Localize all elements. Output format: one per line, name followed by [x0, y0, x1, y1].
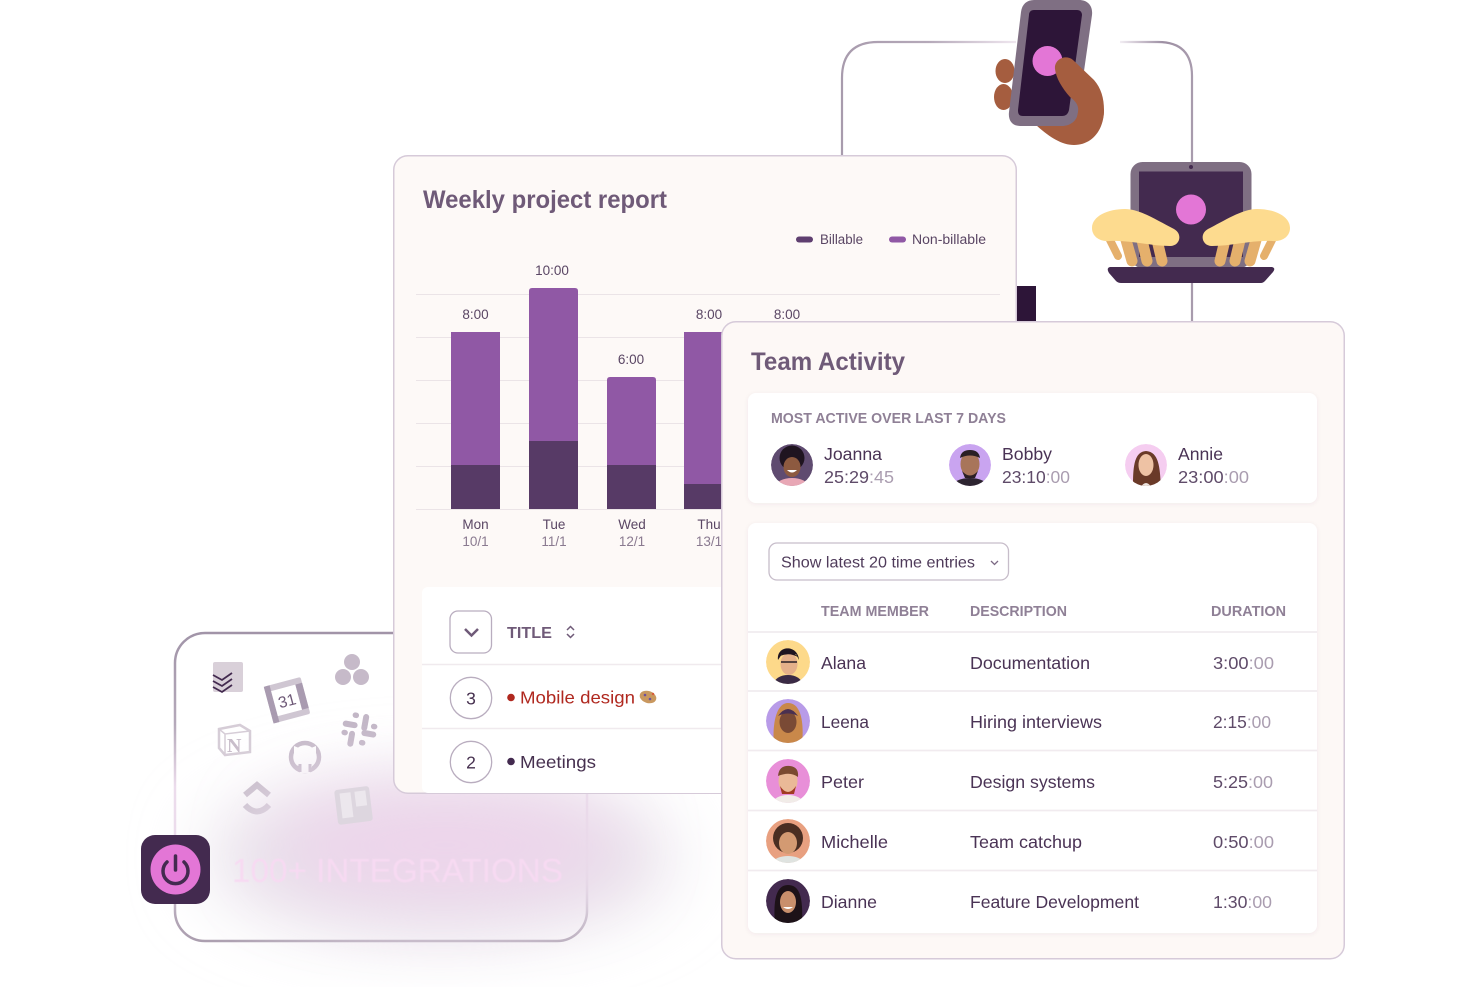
dark block behind team card — [1017, 286, 1036, 322]
icon: power button — [141, 835, 210, 904]
row: Peter: Design systems — [970, 772, 1095, 792]
bar: Thursday: 13/1 — [696, 534, 722, 549]
icon: notion: N — [227, 735, 242, 757]
bar: Wednesday: 12/1 — [619, 534, 645, 549]
expand button — [450, 611, 492, 653]
row: Leena: Hiring interviews — [970, 712, 1102, 732]
person: Bobby — [949, 444, 1070, 486]
icon: slack — [342, 714, 376, 747]
row: Alana: Documentation — [970, 653, 1090, 673]
row: Dianne: Feature Development — [970, 892, 1139, 912]
bar: Tuesday: 11/1 — [541, 534, 567, 549]
row: Leena: Leena — [821, 712, 869, 732]
row: mobile design — [450, 677, 658, 719]
person: Joanna — [771, 444, 894, 486]
bar: Monday: 10/1 — [462, 534, 489, 549]
icon: palette — [640, 690, 656, 704]
row: meetings: Meetings — [520, 752, 596, 772]
bar: Monday: 8:00 — [462, 307, 489, 322]
person: Joanna: 25:29:45 — [824, 467, 894, 487]
dropdown: latest entries — [769, 543, 1008, 580]
panel: integrations — [141, 633, 675, 941]
bar: Wednesday: Wed — [618, 517, 646, 532]
glow behind label — [205, 780, 675, 936]
legend — [796, 232, 986, 247]
bar: Tuesday — [529, 263, 578, 549]
icon: asana — [335, 654, 369, 685]
illustration: hand holding phone — [994, 0, 1104, 145]
bar: Thursday: 8:00 — [696, 307, 722, 322]
panel: weekly project report — [394, 156, 1016, 793]
legend: Non-billable — [912, 232, 986, 247]
row: Peter: 5:25:00 — [1213, 772, 1273, 792]
label: 100+ integrations: 100+ INTEGRATIONS — [232, 852, 563, 889]
row: Peter — [766, 759, 1272, 803]
bar: Thursday — [684, 307, 733, 549]
row: Leena: 2:15:00 — [1213, 712, 1271, 732]
row: Alana — [766, 640, 1274, 684]
legend: Billable — [820, 232, 863, 247]
person: Annie: Annie — [1178, 444, 1223, 464]
icon: notion — [219, 725, 250, 757]
icon: google calendar: 31 — [277, 691, 298, 712]
person: Annie: 23:00:00 — [1178, 467, 1249, 487]
row: Michelle: Michelle — [821, 832, 888, 852]
row: Alana: 3:00:00 — [1213, 653, 1274, 673]
icon: todoist — [213, 662, 243, 692]
bar: Monday — [451, 307, 500, 549]
icon: clickup — [245, 785, 269, 812]
person: Joanna: Joanna — [824, 444, 882, 464]
panel: team activity — [722, 322, 1344, 959]
bar: Thursday: Thu — [697, 517, 721, 532]
person: Annie — [1125, 444, 1249, 490]
bar chart — [416, 263, 1000, 549]
panel: most active — [748, 393, 1317, 503]
row: Alana: Alana — [821, 653, 866, 673]
person: Bobby: Bobby — [1002, 444, 1052, 464]
row: Dianne — [766, 879, 1272, 925]
table header: DESCRIPTION — [970, 603, 1067, 620]
bar: Wednesday — [607, 352, 656, 549]
row: Peter: Peter — [821, 772, 864, 792]
bar: Wednesday: 6:00 — [618, 352, 644, 367]
heading: team activity: Team Activity — [751, 348, 905, 376]
row: meetings: 2 — [466, 752, 476, 772]
row: Michelle: 0:50:00 — [1213, 832, 1274, 852]
row: Dianne: 1:30:00 — [1213, 892, 1272, 912]
row: Leena — [766, 699, 1271, 745]
row: mobile design: 3 — [466, 688, 476, 708]
person: Bobby: 23:10:00 — [1002, 467, 1070, 487]
connector line: phone to laptop — [842, 42, 1192, 322]
icon: google calendar — [264, 677, 310, 724]
row: meetings — [450, 741, 596, 783]
bar: Monday: Mon — [462, 517, 489, 532]
bar: Tuesday: Tue — [543, 517, 565, 532]
icon: github — [291, 743, 319, 773]
dropdown: latest entries: Show latest 20 time entries — [781, 554, 975, 572]
table header: DURATION — [1211, 603, 1286, 620]
row: Dianne: Dianne — [821, 892, 877, 912]
row: mobile design: Mobile design — [520, 688, 635, 708]
table header — [821, 603, 1286, 620]
icon: trello — [334, 786, 373, 825]
value label: Friday: 8:00 — [774, 307, 800, 322]
table header: TEAM MEMBER — [821, 603, 929, 620]
table: projects — [422, 610, 721, 793]
bar: Tuesday: 10:00 — [535, 263, 569, 278]
row: Michelle: Team catchup — [970, 832, 1082, 852]
column header: title — [507, 626, 574, 638]
panel: time entries — [748, 523, 1317, 933]
row: Michelle — [766, 819, 1274, 863]
heading: weekly project report: Weekly project report — [423, 186, 668, 214]
column header: title: TITLE — [507, 625, 552, 642]
illustration: hands on laptop — [1092, 162, 1290, 283]
subheading: most active: MOST ACTIVE OVER LAST 7 DAYS — [771, 411, 1006, 427]
